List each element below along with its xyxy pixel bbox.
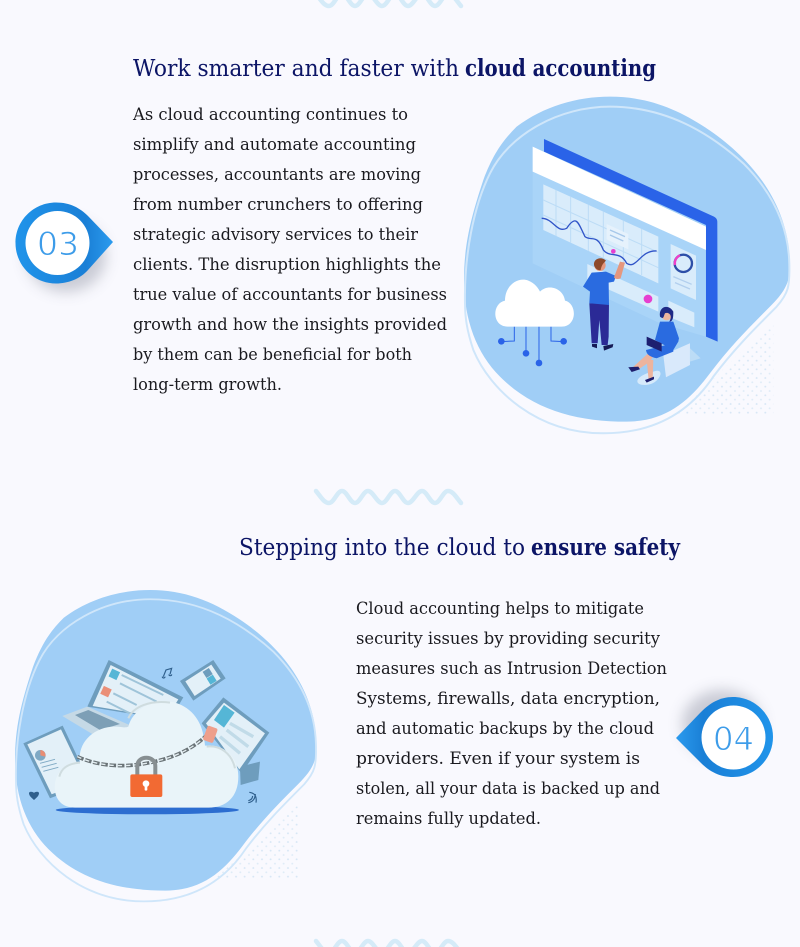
text block: section 04 body: measures such as Intrusion Detection [356, 659, 667, 679]
blob outline [16, 599, 316, 901]
icon: laptop [62, 660, 183, 737]
text block: section 03 body: strategic advisory services to their [133, 225, 419, 245]
text block: section 03 body: by them can be beneficial for both [133, 345, 412, 365]
text block: section 03 body: long-term growth. [133, 375, 282, 395]
chart panel [543, 184, 658, 283]
text block: section 04 body: stolen, all your data is backed up and [356, 779, 660, 799]
text block: section 04 body: Cloud accounting helps to mitigate [356, 599, 644, 619]
text block: section 03 body: clients. The disruption highlights the [133, 255, 441, 275]
illustration: chained cloud with devices [15, 590, 317, 901]
blob background [15, 590, 317, 891]
badge: 03 [16, 202, 113, 292]
heading: cloud accounting: Work smarter and faster with [133, 56, 459, 82]
text block: section 04 body: remains fully updated. [356, 809, 541, 829]
text block: section 03 body: simplify and automate accounting [133, 135, 416, 155]
text block: section 04 body: security issues by providing security [356, 629, 660, 649]
text block: section 03 body: true value of accountants for business [133, 285, 447, 305]
text block: section 04 body [356, 599, 667, 829]
wave divider: middle [316, 491, 461, 503]
lower panels [587, 264, 658, 312]
cloud shadow [56, 806, 239, 814]
person standing [583, 258, 625, 351]
donut panel [671, 244, 696, 300]
dotted pattern [213, 803, 300, 880]
blob outline [465, 107, 789, 433]
text block: section 03 body: growth and how the insights provided [133, 315, 447, 335]
dashboard screen [533, 139, 718, 342]
illustration: cloud dashboard with people [464, 97, 790, 433]
badge: 04: 04 [713, 720, 754, 758]
heading: ensure safety: Stepping into the cloud to [239, 535, 525, 561]
cloud [55, 701, 238, 808]
icon: chain and padlock [77, 725, 218, 797]
text block: section 03 body: processes, accountants are moving [133, 165, 421, 185]
icon: monitor [202, 697, 269, 785]
heading: ensure safety: ensure safety [531, 534, 681, 561]
text block: section 04 body: Systems, firewalls, data encryption, [356, 689, 660, 709]
icon: music note [162, 668, 172, 678]
heading: cloud accounting [133, 55, 656, 82]
text block: section 04 body: and automatic backups by the cloud [356, 719, 654, 739]
text block: section 03 body [132, 105, 447, 395]
wave divider: top [316, 0, 461, 6]
badge: 04 [676, 690, 773, 777]
heading: ensure safety [239, 534, 681, 561]
badge: 03: 03 [37, 225, 79, 263]
cloud with connectors [495, 280, 574, 366]
blob background [464, 97, 790, 422]
heading: cloud accounting: cloud accounting [465, 55, 656, 82]
icon: phone [180, 660, 226, 701]
wave divider: bottom [316, 941, 461, 947]
icon: heart [29, 792, 39, 799]
text block: section 04 body: providers. Even if your system is [356, 749, 640, 769]
icon: wifi [248, 792, 256, 803]
text block: section 03 body: As cloud accounting continues to [132, 105, 408, 125]
dotted pattern [677, 320, 773, 415]
icon: tablet left [23, 726, 90, 798]
person sitting with laptop [628, 307, 701, 385]
text block: section 03 body: from number crunchers to offering [133, 195, 423, 215]
